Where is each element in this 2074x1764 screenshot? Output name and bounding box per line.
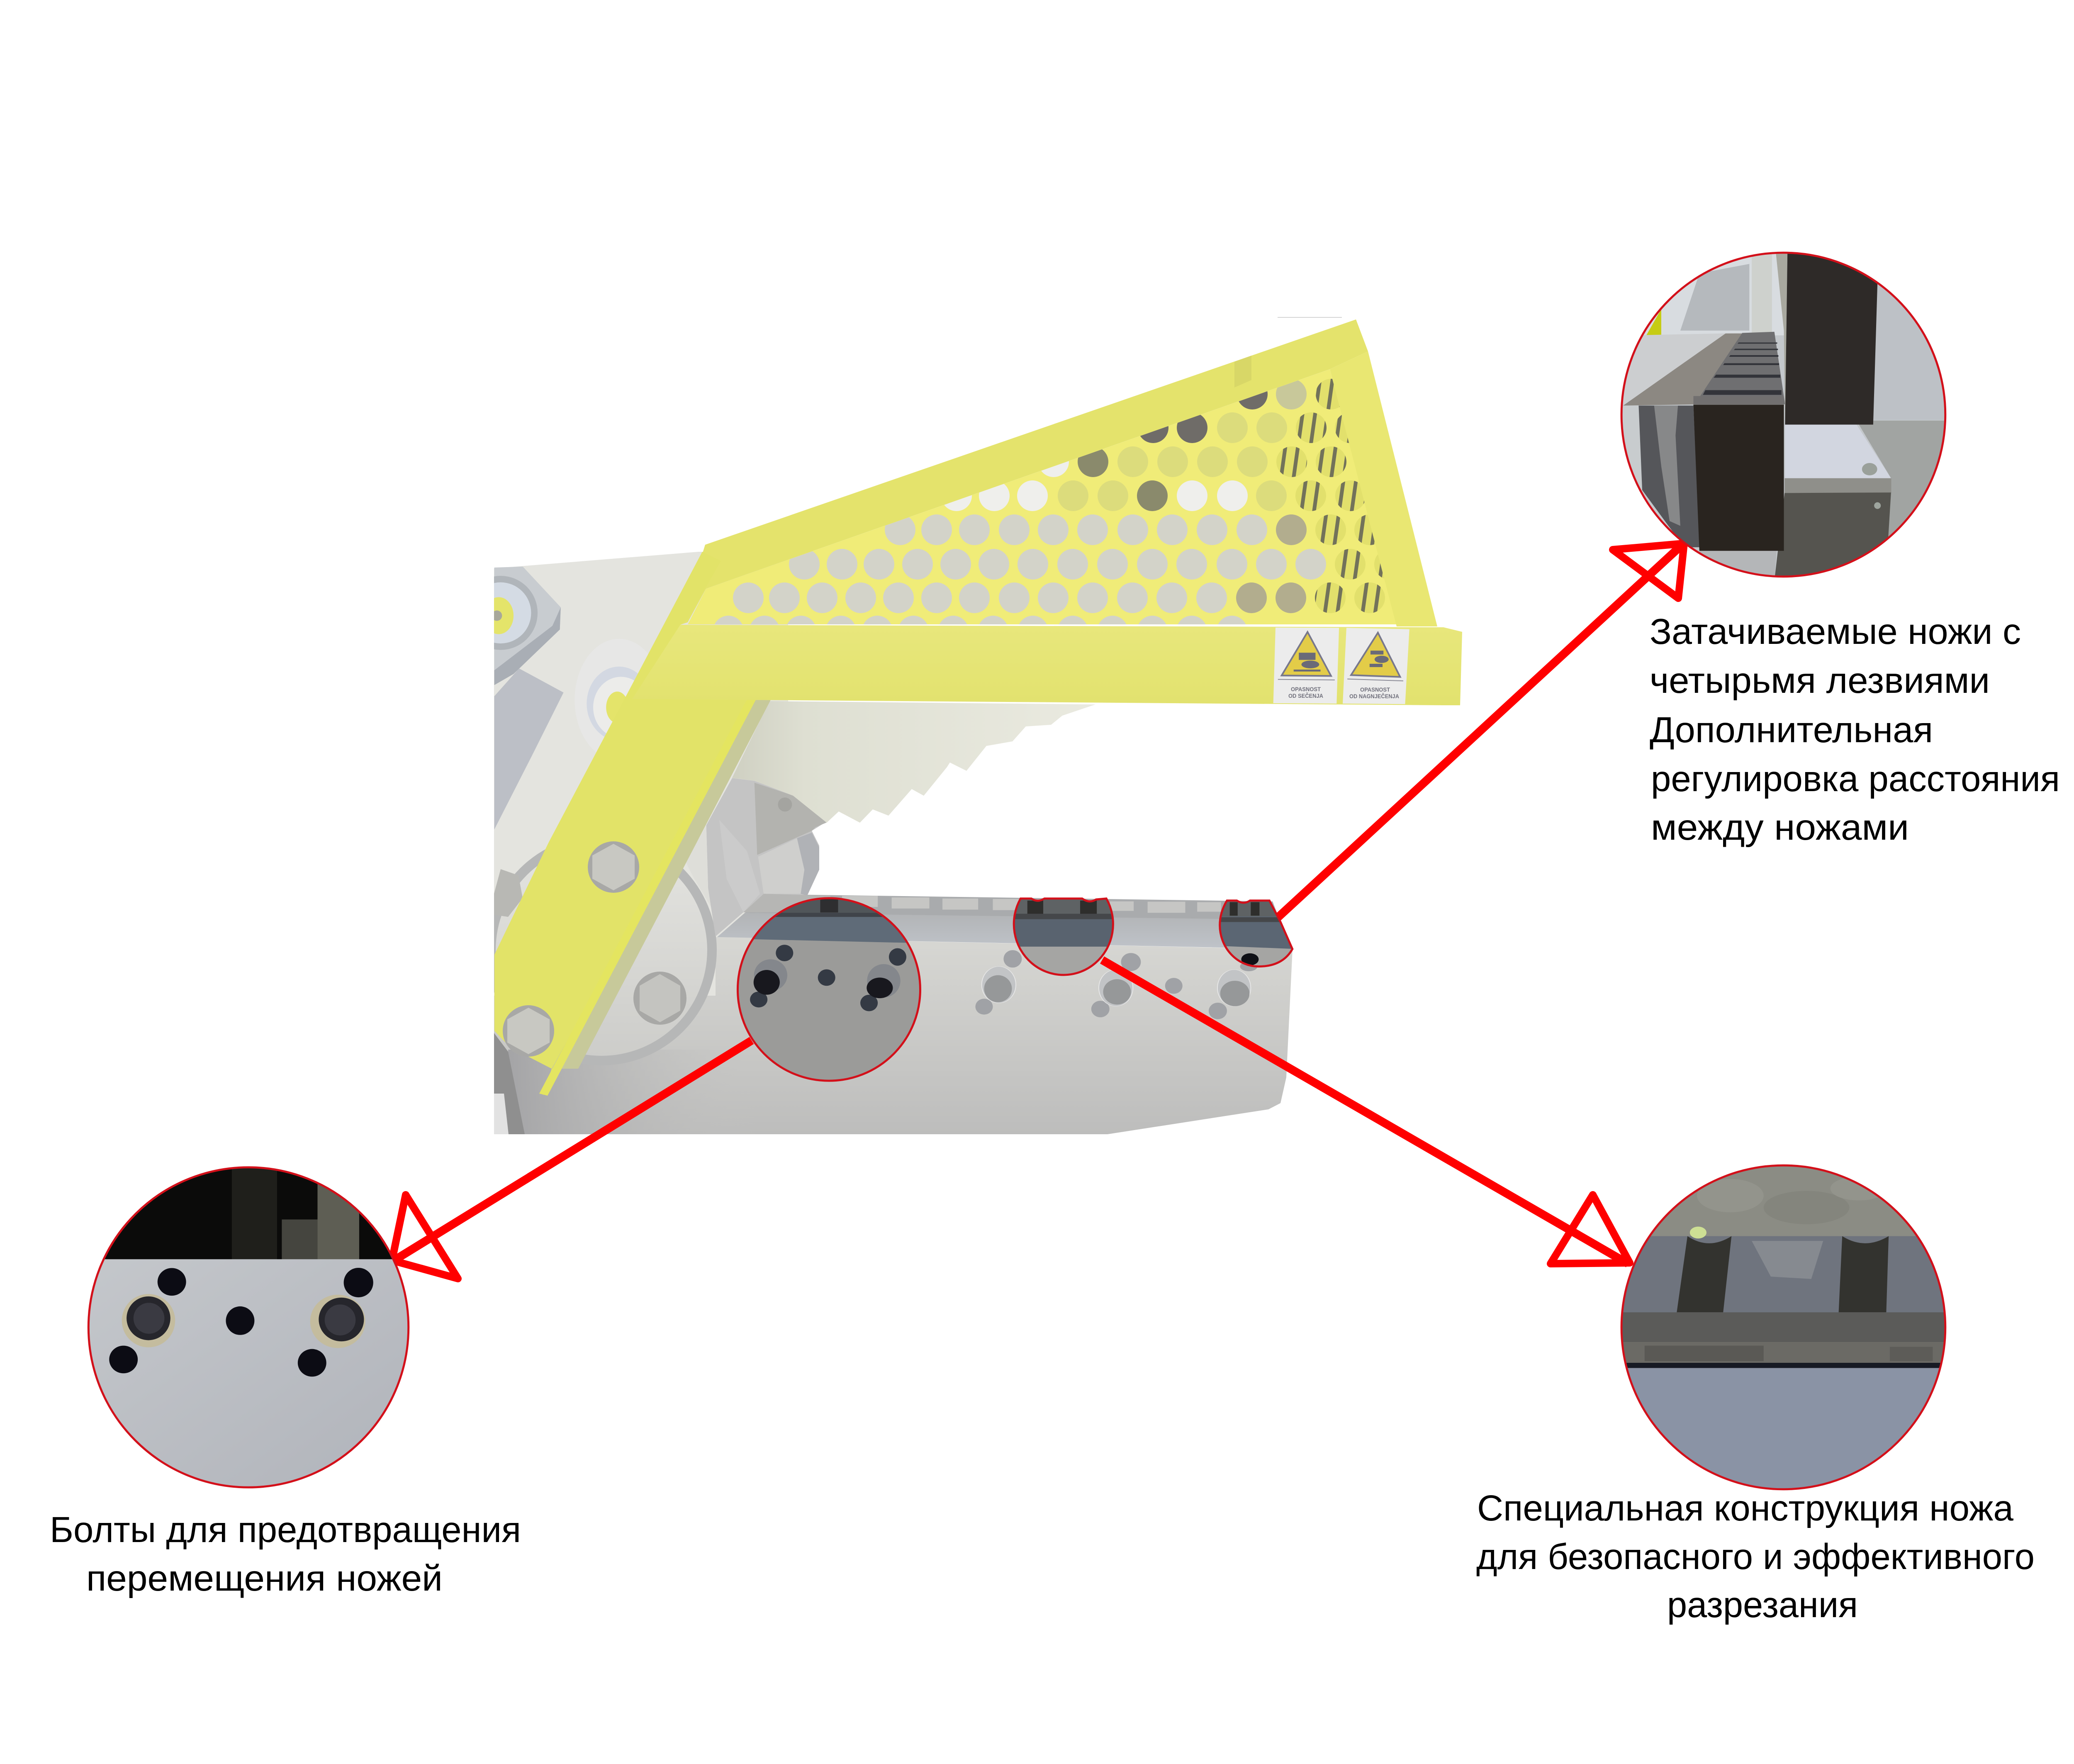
text block: bottom right caption: для безопасного и эффективного	[1476, 1537, 2035, 1577]
right rail	[1330, 351, 1437, 626]
text block: top right caption: между ножами	[1651, 807, 1909, 848]
detail circle: four-edge sharpenable knives	[1619, 250, 1954, 583]
perforated mesh panel	[688, 369, 1405, 646]
warning stickers: OD NAGNJEČENJA	[1349, 692, 1399, 699]
faint top line	[1278, 317, 1342, 318]
lower left dark strip and label	[494, 1033, 638, 1134]
text block: top right caption: четырьмя лезвиями	[1650, 660, 1990, 701]
warning stickers	[1273, 628, 1409, 704]
detail circle: knife construction	[1619, 1162, 1952, 1497]
text block: bottom right caption	[1476, 1488, 2035, 1625]
inset highlight: knife end on holder	[1217, 900, 1296, 968]
text block: top right caption: Дополнительная	[1650, 710, 1933, 750]
machine body housing	[494, 552, 788, 1037]
text block: left caption	[50, 1510, 521, 1598]
front support arm	[494, 552, 747, 1096]
horizontal rail	[632, 625, 1462, 705]
text block: top right caption: регулировка расстояния	[1651, 759, 2060, 799]
text block: top right caption	[1650, 612, 2060, 848]
sloped top rail	[680, 319, 1368, 625]
inset highlight: bolts on holder	[729, 895, 935, 1086]
warning stickers: OD SEČENJA	[1288, 692, 1323, 699]
lower knife holder: top face and knife teeth row	[717, 894, 1293, 1019]
text block: bottom right caption: Специальная конструкция ножа	[1477, 1488, 2014, 1528]
flange disc with bolts	[494, 850, 717, 1061]
text block: left caption: Болты для предотвращения	[50, 1510, 521, 1550]
yellow safety guard	[494, 319, 1462, 1096]
guard bolts	[503, 841, 639, 1057]
grease fitting, nut and housing cut-outs	[494, 567, 638, 830]
detail circle: retaining bolts	[87, 1165, 413, 1497]
lower knife holder: front face	[494, 937, 1293, 1134]
connector arrow: left ellipse to bolts detail	[392, 1040, 752, 1279]
text block: bottom right caption: разрезания	[1667, 1585, 1858, 1625]
machine photo: knife shear housing and blades	[464, 317, 1342, 1134]
central mechanism behind blade	[686, 778, 830, 936]
connector arrow: knife end to sharpened knives detail	[1277, 543, 1684, 918]
warning stickers: OPASNOST	[1360, 686, 1390, 693]
inset highlight: knife slots on holder	[1011, 897, 1118, 977]
text block: top right caption: Затачиваемые ножи с	[1650, 612, 2021, 652]
connector arrow: centre ellipse to knife construction detail	[1102, 960, 1630, 1264]
warning stickers: OPASNOST	[1291, 686, 1321, 692]
text block: left caption: перемещения ножей	[86, 1558, 443, 1598]
upper serrated blade	[732, 701, 1095, 823]
